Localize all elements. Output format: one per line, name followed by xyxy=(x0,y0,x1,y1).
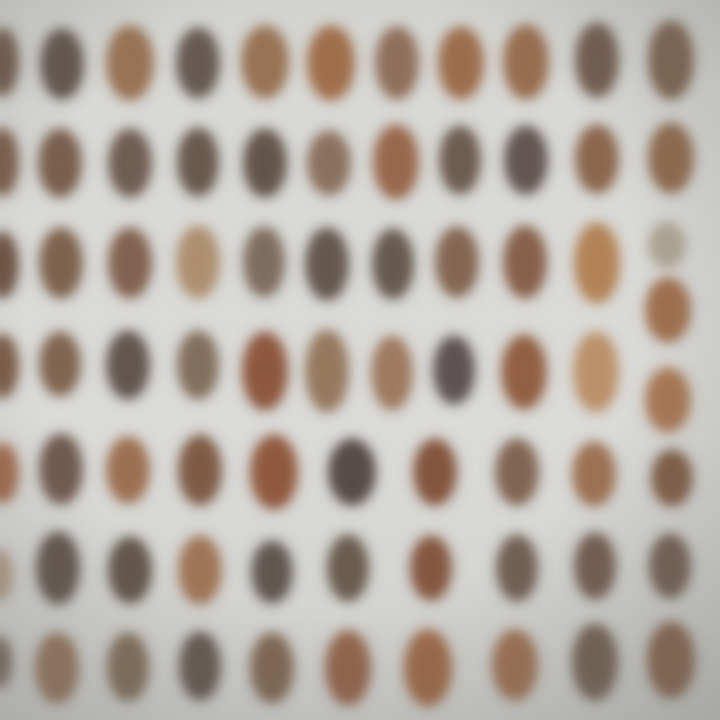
row 4 xyxy=(0,331,689,431)
row 5 xyxy=(0,435,691,508)
row 2 xyxy=(0,124,692,198)
row 7 xyxy=(0,623,693,705)
row 3 xyxy=(0,223,689,341)
row 6 xyxy=(0,533,689,603)
row 1 xyxy=(0,22,692,99)
